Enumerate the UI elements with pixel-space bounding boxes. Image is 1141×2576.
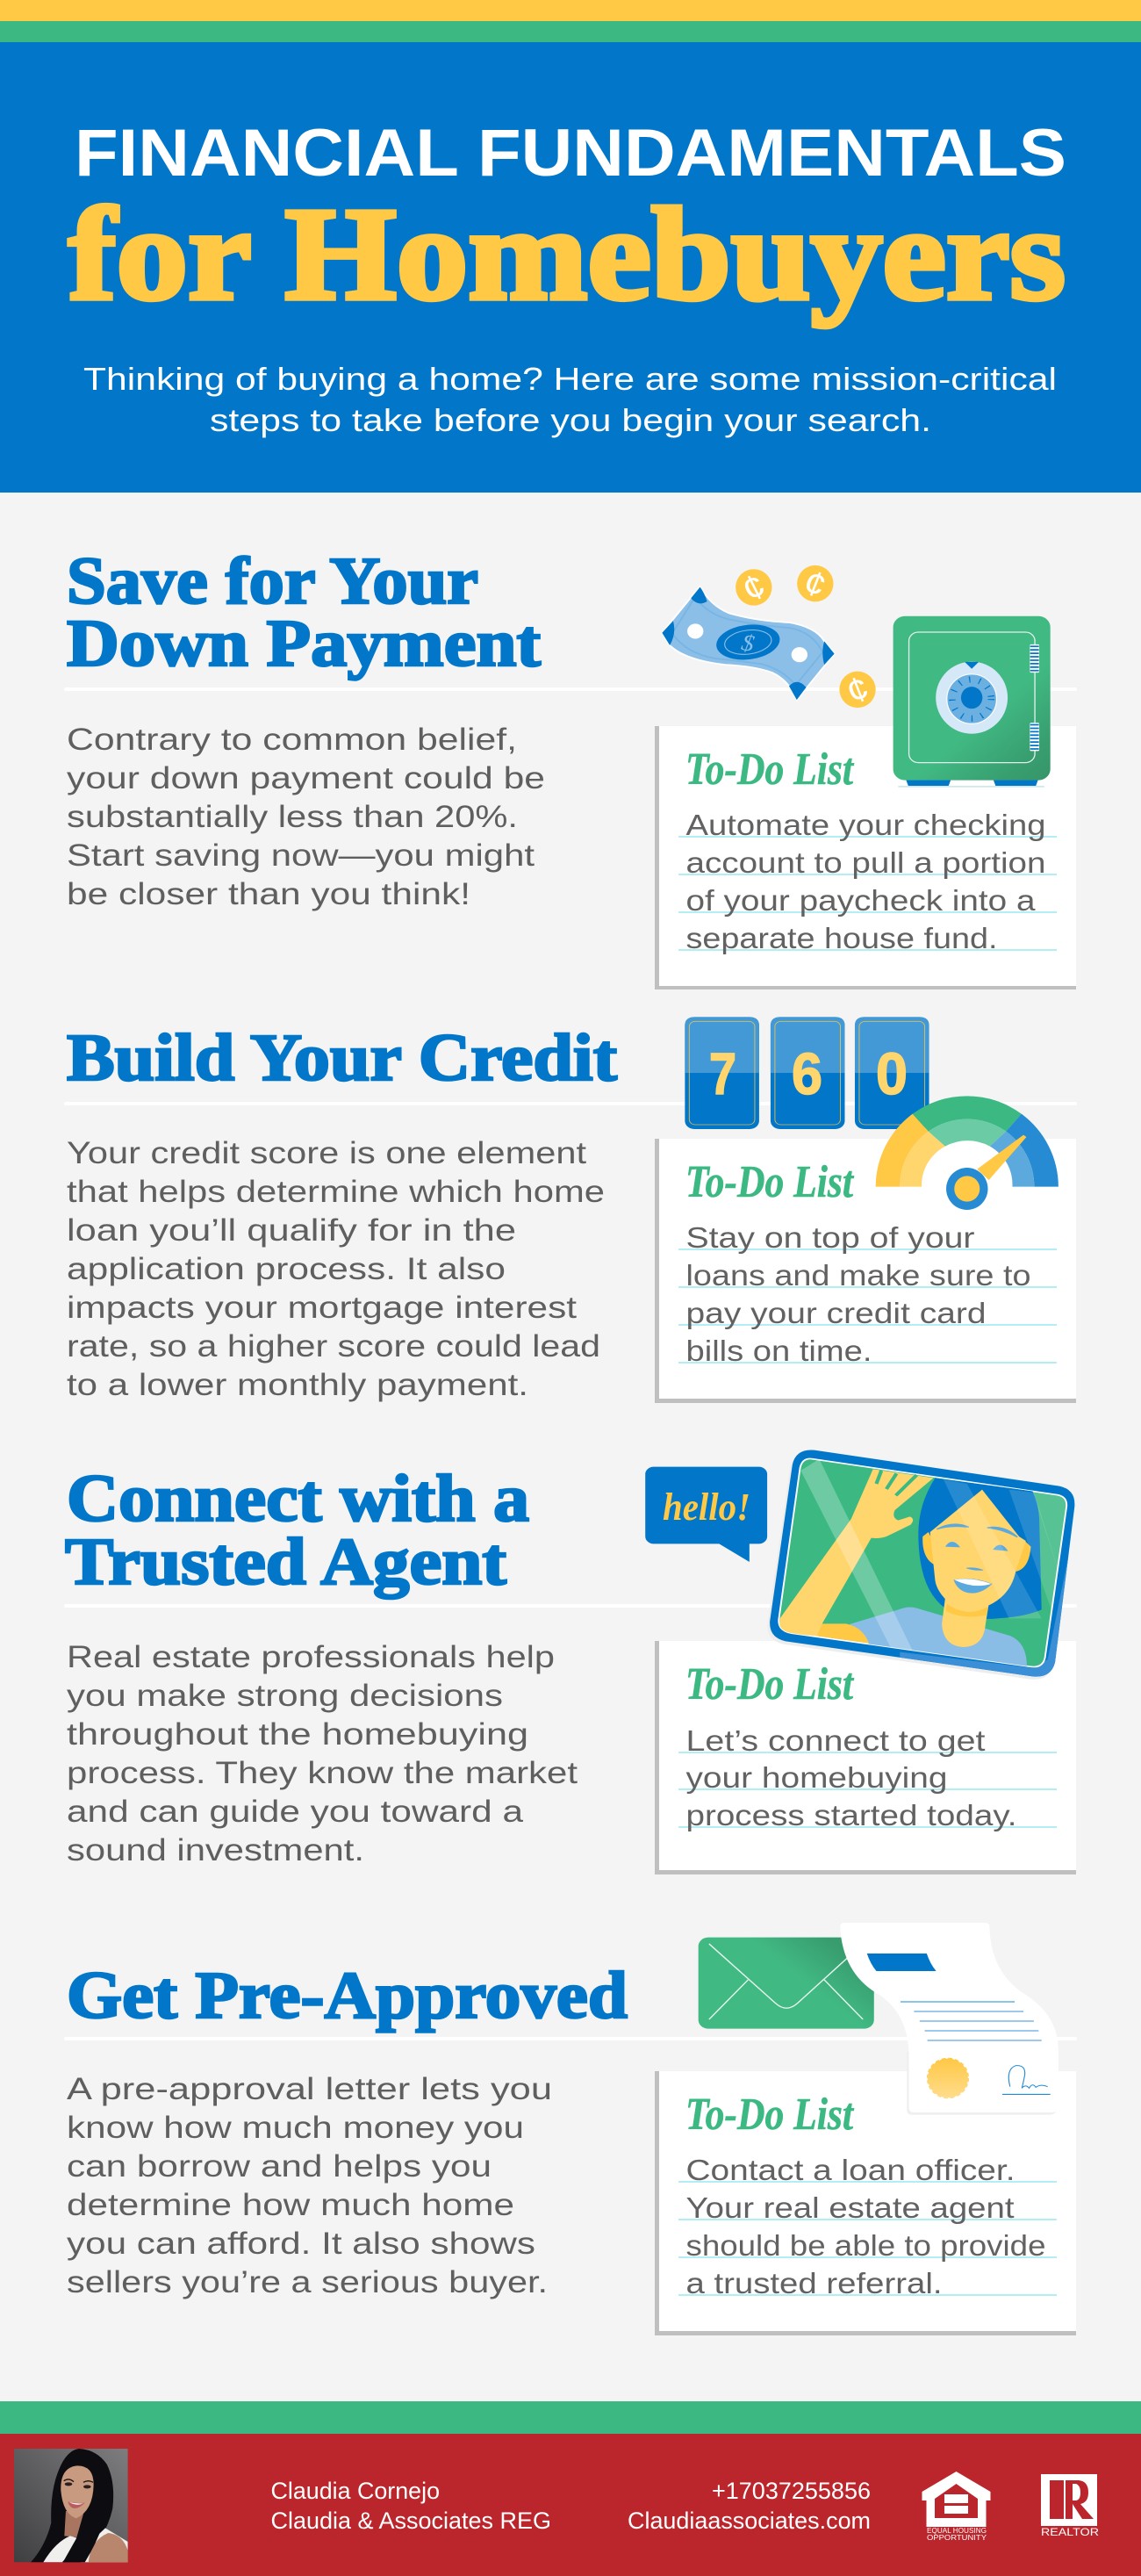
- illustration: envelope and letter: [699, 1923, 1058, 2115]
- score cards: 6: [792, 1041, 822, 1107]
- body text: that helps determine which home: [67, 1175, 605, 1209]
- agent contact details: +17037255856: [712, 2478, 871, 2504]
- body text: know how much money you: [67, 2111, 524, 2145]
- icon: coin: ¢: [841, 667, 875, 711]
- heading: connect with a trusted agent: Trusted Agent: [65, 1525, 506, 1599]
- icon: realtor: REALTOR: [1041, 2528, 1099, 2538]
- to-do card: [655, 2071, 1076, 2335]
- heading: save for your down payment: Down Payment: [67, 607, 541, 680]
- body text: A pre-approval letter lets you: [67, 2072, 552, 2106]
- body text: impacts your mortgage interest: [67, 1291, 577, 1325]
- icon: dollar bill: $: [739, 630, 757, 657]
- to-do text: [686, 1724, 1016, 1831]
- section: get pre-approved: [64, 1923, 1077, 2335]
- body text: determine how much home: [67, 2188, 514, 2222]
- body text: substantially less than 20%.: [67, 800, 518, 834]
- agent contact details: Claudiaassociates.com: [628, 2508, 871, 2534]
- to-do text: account to pull a portion: [686, 846, 1046, 879]
- body text: you can afford. It also shows: [67, 2227, 535, 2261]
- body text: sound investment.: [67, 1833, 364, 1867]
- section: connect with a trusted agent: [64, 1450, 1085, 1874]
- icon: equal housing opportunity: EQUAL HOUSING: [927, 2526, 987, 2535]
- body text: and can guide you toward a: [67, 1795, 524, 1829]
- intro text: [83, 361, 1057, 438]
- body text: throughout the homebuying: [67, 1717, 528, 1752]
- header banner: [0, 0, 1141, 493]
- score cards: 7: [709, 1041, 736, 1107]
- body text: [67, 2072, 552, 2299]
- body text: [67, 1136, 605, 1402]
- illustration: score cards and gauge: [685, 1017, 1058, 1210]
- to-do text: [686, 2154, 1046, 2299]
- to-do text: [686, 809, 1046, 954]
- body text: loan you’ll qualify for in the: [67, 1213, 516, 1248]
- to-do text: separate house fund.: [686, 922, 997, 954]
- to-do text: Automate your checking: [686, 809, 1046, 841]
- to-do text: your homebuying: [686, 1761, 948, 1794]
- to-do text: of your paycheck into a: [686, 884, 1036, 917]
- agent name and company: Claudia & Associates REG: [270, 2508, 551, 2534]
- icon: safe: [893, 616, 1051, 788]
- body text: Contrary to common belief,: [67, 723, 517, 757]
- to-do text: Contact a loan officer.: [686, 2154, 1015, 2186]
- to-do text: Let’s connect to get: [686, 1724, 985, 1757]
- to-do card: [655, 726, 1076, 989]
- icon: approval letter: [840, 1923, 1058, 2115]
- heading: connect with a trusted agent: Connect with a: [67, 1462, 529, 1536]
- body text: you make strong decisions: [67, 1679, 503, 1713]
- to-do card: [655, 1641, 1076, 1874]
- body text: your down payment could be: [67, 761, 545, 795]
- body text: sellers you’re a serious buyer.: [67, 2265, 548, 2299]
- speech bubble: [645, 1467, 767, 1562]
- to-do heading: To-Do List: [685, 1157, 854, 1207]
- body text: Real estate professionals help: [67, 1640, 555, 1674]
- to-do text: process started today.: [686, 1799, 1016, 1831]
- intro text: Thinking of buying a home? Here are some mission-critical: [83, 361, 1057, 397]
- body text: rate, so a higher score could lead: [67, 1329, 600, 1364]
- body text: [67, 723, 545, 911]
- to-do text: bills on time.: [686, 1335, 872, 1367]
- agent name and company: [270, 2478, 551, 2534]
- to-do heading: To-Do List: [685, 2090, 854, 2140]
- icon: equal housing opportunity: OPPORTUNITY: [927, 2533, 987, 2542]
- score cards: 0: [876, 1041, 908, 1107]
- to-do text: should be able to provide: [686, 2229, 1046, 2262]
- body text: [67, 1640, 578, 1867]
- to-do text: Stay on top of your: [686, 1221, 974, 1254]
- icon: coin: ¢: [798, 561, 832, 606]
- body text: Your credit score is one element: [67, 1136, 586, 1170]
- footer: [0, 2401, 1141, 2576]
- section: build your credit: [64, 1017, 1077, 1403]
- to-do text: loans and make sure to: [686, 1259, 1030, 1292]
- intro text: steps to take before you begin your search.: [210, 402, 931, 438]
- icon: envelope: [699, 1938, 874, 2029]
- agent portrait: [14, 2449, 128, 2562]
- body text: process. They know the market: [67, 1756, 578, 1790]
- to-do text: Your real estate agent: [686, 2191, 1015, 2224]
- icon: realtor: [1041, 2474, 1099, 2538]
- icon: dollar bill: [662, 586, 835, 700]
- body text: be closer than you think!: [67, 877, 470, 911]
- illustration: hello bubble and video call: [645, 1450, 1085, 1695]
- video call card: [767, 1450, 1085, 1695]
- body text: can borrow and helps you: [67, 2149, 492, 2184]
- illustration: money, coins and safe: [662, 561, 1051, 788]
- icon: equal housing opportunity: [922, 2472, 990, 2542]
- score cards: [685, 1017, 929, 1129]
- section: save for your down payment: [64, 544, 1077, 989]
- body text: application process. It also: [67, 1252, 506, 1286]
- speech bubble: hello!: [663, 1486, 750, 1529]
- body text: to a lower monthly payment.: [67, 1368, 528, 1402]
- title line 1: FINANCIAL FUNDAMENTALS: [75, 116, 1066, 191]
- heading: save for your down payment: Save for Your: [67, 544, 478, 618]
- to-do text: a trusted referral.: [686, 2267, 943, 2299]
- title line 2: for Homebuyers: [68, 180, 1066, 327]
- agent contact details: [628, 2478, 871, 2534]
- gauge: [876, 1096, 1058, 1210]
- heading: connect with a trusted agent: [65, 1462, 529, 1599]
- to-do text: pay your credit card: [686, 1297, 987, 1329]
- heading: get pre-approved: Get Pre-Approved: [67, 1959, 628, 2033]
- to-do card: [655, 1139, 1076, 1403]
- to-do heading: To-Do List: [685, 1659, 854, 1709]
- heading: save for your down payment: [67, 544, 541, 680]
- agent name and company: Claudia Cornejo: [270, 2478, 440, 2504]
- heading: build your credit: Build Your Credit: [67, 1021, 617, 1095]
- body text: Start saving now—you might: [67, 838, 535, 873]
- to-do text: [686, 1221, 1030, 1367]
- icon: coin: ¢: [736, 565, 772, 609]
- to-do heading: To-Do List: [685, 745, 854, 795]
